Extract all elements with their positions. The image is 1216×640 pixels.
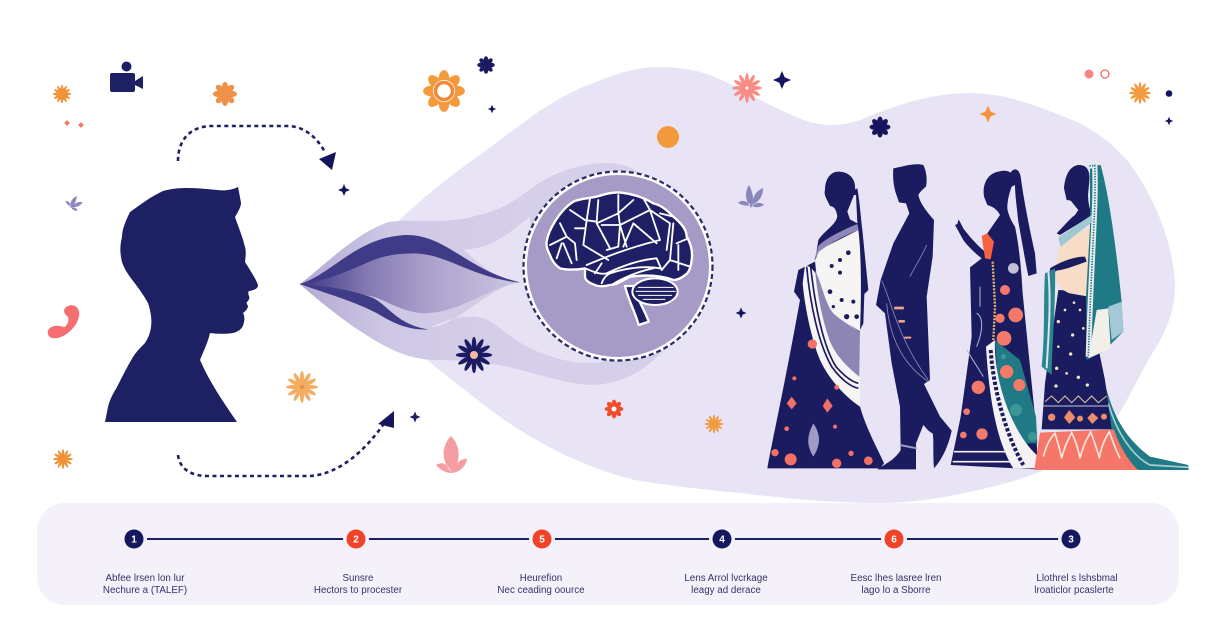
orange blouse: [982, 233, 994, 259]
step 6: [1034, 526, 1118, 596]
brain folds: [550, 195, 690, 285]
step 1: Nechure a (TALEF): [103, 585, 187, 596]
timeline line: [147, 538, 1060, 540]
icon: orange plus: [980, 106, 996, 122]
dashed arrow top: [178, 126, 336, 170]
step 4: 4: [719, 534, 725, 546]
step 5: lago lo a Sborre: [861, 585, 931, 596]
icon: orange star top right: [1129, 82, 1151, 104]
step 2: Hectors to procester: [314, 585, 403, 596]
icon: orange star bottom left: [53, 449, 73, 469]
icon: pink flower: [732, 73, 762, 103]
coral hem: [1034, 429, 1138, 470]
icon: star by arrow: [338, 184, 350, 196]
dark lower wave: [300, 284, 428, 329]
step 2: Sunsre: [342, 573, 374, 584]
step 4: Lens Arrol lvcrkage: [684, 573, 768, 584]
icon: orange sun: [657, 126, 679, 148]
white pattern border: [986, 340, 1037, 468]
dashed arrow bottom: [178, 411, 394, 476]
figure: woman three: [1034, 165, 1189, 470]
icon: navy round flower: [870, 117, 890, 137]
icon: coral dots: [64, 120, 84, 128]
step 6: lroaticlor pcaslerte: [1034, 585, 1114, 596]
icon: orange blob flower: [213, 82, 237, 106]
icon: orange star lower: [705, 415, 723, 433]
skirt motifs: [771, 339, 873, 468]
step 1: Abfee lrsen lon lur: [106, 573, 185, 584]
figure: woman two: [951, 169, 1037, 469]
step 3: Heurefion: [520, 573, 562, 584]
step 4: leagy ad derace: [691, 585, 761, 596]
step 5: Eesc lhes lasree lren: [851, 573, 941, 584]
lens gradient interior: [300, 253, 520, 313]
cerebrum: [546, 192, 692, 286]
icon: navy diamond: [488, 105, 496, 113]
icon: coral dots top right: [1084, 70, 1109, 78]
white drape: [815, 230, 861, 332]
icon: plus star: [410, 412, 420, 422]
icon: small leaf left: [64, 192, 84, 212]
icon: navy four point: [773, 71, 791, 89]
brain circle: [523, 171, 713, 361]
step 6: 3: [1068, 534, 1074, 546]
icon: orange star left: [53, 85, 71, 103]
icon: navy daisy: [456, 337, 492, 373]
step 2: 2: [353, 534, 359, 546]
step 2: [314, 526, 403, 596]
teal trail: [995, 340, 1037, 443]
navy silhouette: [1057, 165, 1093, 235]
flow bands into brain: [300, 163, 663, 385]
gap beside neck: [847, 195, 857, 223]
figure: woman one: [767, 172, 884, 468]
striped sash: [803, 265, 860, 407]
person head silhouette: [105, 187, 258, 422]
icon: small star mid: [736, 308, 746, 318]
wide flow envelope: [300, 163, 663, 385]
timeline panel: [37, 503, 1179, 605]
background blob: [300, 67, 1175, 503]
step 3: Nec ceading oource: [497, 585, 585, 596]
icon: pink leaf: [436, 436, 467, 473]
cerebellum: [632, 278, 678, 305]
step 1: [103, 526, 187, 596]
lighter gap between bands: [430, 217, 607, 363]
step 6: Llothrel s lshsbmal: [1036, 573, 1118, 584]
icon: navy dots top right: [1165, 90, 1173, 125]
icon: lavender leaf: [738, 185, 764, 208]
step 3: 5: [539, 534, 545, 546]
teal trail three: [1103, 377, 1189, 470]
step 5: 6: [891, 534, 897, 546]
dark upper lens: [300, 235, 520, 285]
step 3: [497, 526, 585, 596]
brain icon: [546, 192, 692, 325]
icon: peach flower: [286, 371, 318, 403]
figures group: [767, 164, 1189, 470]
step 1: 1: [131, 534, 137, 546]
icon: orange sun flower: [423, 70, 465, 112]
skirt dots: [1054, 301, 1089, 388]
peach midriff: [1055, 225, 1092, 297]
drape dots: [828, 250, 859, 319]
icon: video camera: [110, 62, 143, 92]
left drape: [1042, 268, 1055, 375]
step 5: [851, 526, 941, 596]
floral motifs: [960, 285, 1025, 440]
figure: man: [876, 164, 952, 469]
icon: phone: [48, 305, 79, 338]
icon: red flower: [605, 400, 623, 418]
icon: small navy flower: [477, 56, 495, 74]
brain stem: [625, 286, 649, 325]
step 4: [684, 526, 768, 596]
teal saree drape: [1086, 165, 1123, 360]
